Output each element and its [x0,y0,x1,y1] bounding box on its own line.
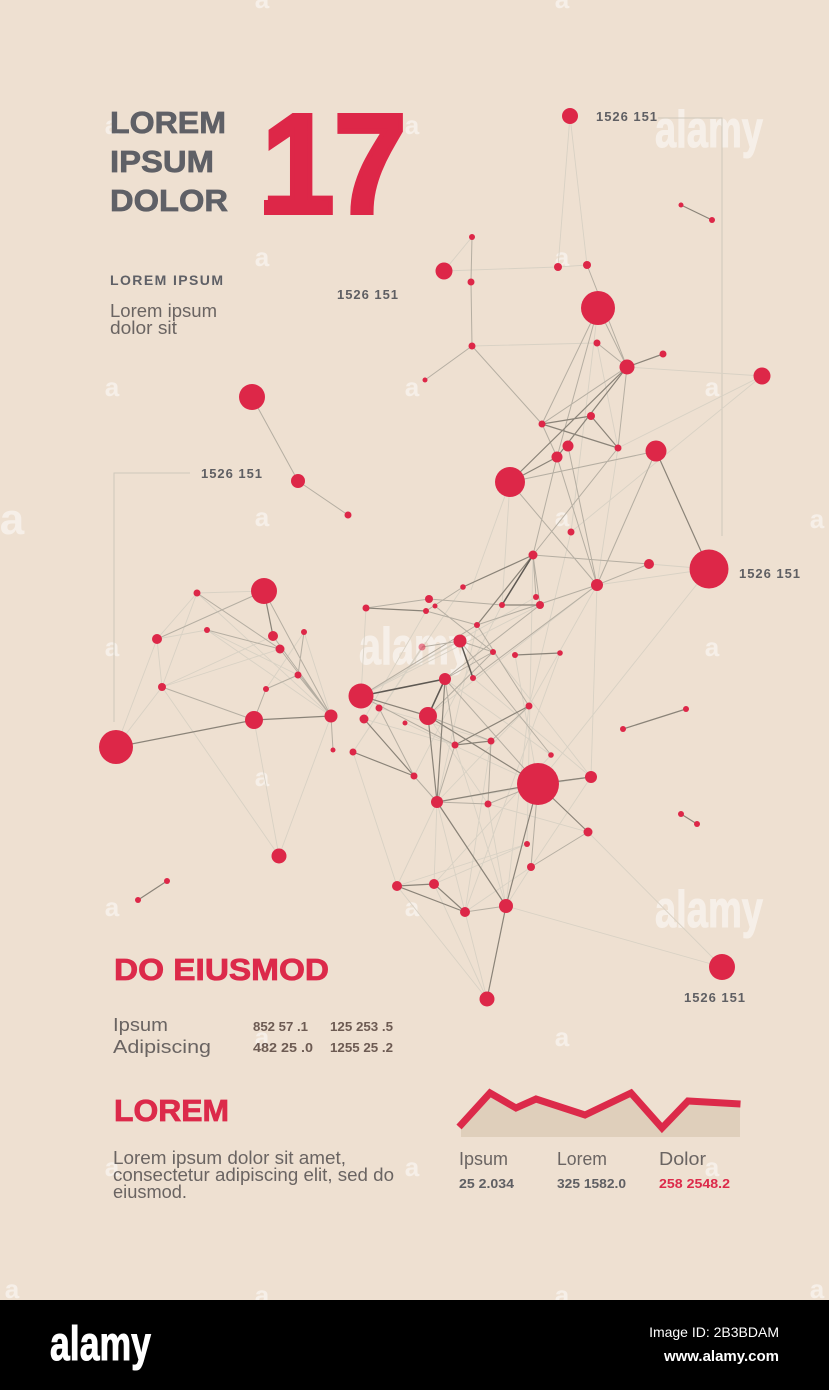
watermark pattern: a [255,762,270,792]
title: LOREM [110,105,226,140]
chart legend: 325 1582.0 [557,1176,626,1191]
chart legend [459,1149,730,1191]
data table: 125 253 .5 [330,1019,393,1034]
chart legend: Lorem [557,1149,607,1169]
watermark pattern: a [555,502,570,532]
subheading text block: LOREM IPSUM [110,272,223,288]
data table: 852 57 .1 [253,1019,308,1034]
watermark pattern: a [255,242,270,272]
watermark pattern: a [405,372,420,402]
watermark pattern: a [105,110,120,140]
area line chart [459,1092,740,1137]
footer band: Image ID: 2B3BDAM [649,1324,779,1340]
watermark pattern: a [810,504,825,534]
watermark pattern: a [405,110,420,140]
darkest edges [361,555,533,716]
light edges [116,116,762,999]
data table: 1255 25 .2 [330,1040,393,1055]
data labels: 1526 151 [596,109,657,124]
paragraph: consectetur adipiscing elit, sed do [113,1165,394,1185]
watermark pattern: a [705,372,720,402]
heading: lorem: LOREM [114,1093,229,1128]
big number 17: 17 [262,84,406,243]
footer band: alamy [50,1318,151,1371]
watermark pattern: a [255,1280,270,1310]
watermark pattern: a [0,495,25,544]
data labels [201,109,800,1005]
footer band [0,1300,829,1390]
watermark pattern: a [405,892,420,922]
subheading text block [110,272,223,338]
nodes [99,108,770,1006]
network graph [99,108,770,1006]
watermark pattern: a [705,632,720,662]
data table: 482 25 .0 [253,1040,313,1055]
watermark pattern: a [255,1022,270,1052]
watermark pattern: a [105,372,120,402]
title: DOLOR [110,183,228,218]
watermark pattern: a [105,632,120,662]
subheading text block: Lorem ipsum [110,301,217,321]
watermark pattern: a [555,1280,570,1310]
chart legend: Ipsum [459,1149,508,1169]
data table: Adipiscing [113,1037,211,1057]
subheading text block: dolor sit [110,318,177,338]
watermark pattern: a [555,1022,570,1052]
title: IPSUM [110,144,214,179]
watermark pattern: a [810,1274,825,1304]
dark edges [116,205,712,999]
watermark pattern: alamy [655,101,763,159]
paragraph: Lorem ipsum dolor sit amet, [113,1148,346,1168]
title [110,105,228,218]
watermark pattern: a [705,1152,720,1182]
data labels: 1526 151 [739,566,800,581]
data labels: 1526 151 [337,287,398,302]
data labels: 1526 151 [684,990,745,1005]
paragraph [113,1148,394,1202]
chart legend: 25 2.034 [459,1176,515,1191]
data labels: 1526 151 [201,466,262,481]
watermark pattern: a [555,242,570,272]
watermark pattern: a [405,1152,420,1182]
watermark pattern: a [255,502,270,532]
chart legend: Dolor [659,1149,706,1169]
leader lines [114,118,722,722]
watermark pattern: alamy [359,618,471,676]
watermark pattern: a [105,892,120,922]
watermark pattern: a [105,1152,120,1182]
footer band: www.alamy.com [663,1348,779,1365]
data table: Ipsum [113,1015,168,1035]
chart legend: 258 2548.2 [659,1176,730,1191]
data table [113,1015,393,1057]
medium edges [157,237,657,912]
heading: do eiusmod: DO EIUSMOD [114,952,329,987]
paragraph: eiusmod. [113,1182,187,1202]
watermark pattern: alamy [655,881,763,939]
watermark pattern: a [5,1274,20,1304]
